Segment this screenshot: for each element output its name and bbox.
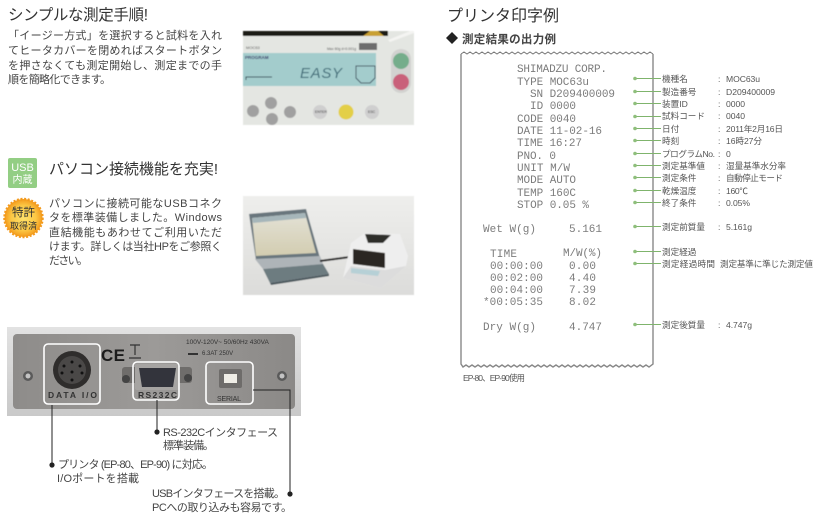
photo: rear panel connectors: RS232C <box>138 390 177 400</box>
annotation labels: 測定経過 <box>662 246 697 257</box>
photo: control panel with EASY display: Max 60g d=0.001g <box>327 47 356 51</box>
annotation labels: プログラムNo. <box>662 148 715 159</box>
receipt printed text: TEMP 160C <box>517 188 576 200</box>
annotation labels: : <box>718 320 720 330</box>
annotation labels: : <box>718 161 720 171</box>
annotation labels: : <box>718 173 720 183</box>
heading: PC connection: パソコン接続機能を充実! <box>49 161 218 178</box>
annotation labels: : <box>718 87 720 97</box>
photo: rear panel connectors: 100V-120V~ 50/60Hz 430VA <box>186 339 269 346</box>
annotation labels: 乾燥温度 <box>662 185 697 196</box>
text block: simple procedure <box>8 28 222 86</box>
annotation labels: 0040 <box>726 111 745 121</box>
receipt printed text: *00:05:35 <box>483 297 543 309</box>
annotation labels: 自動停止モード <box>726 172 783 183</box>
text block: simple procedure: 「イージー方式」を選択すると試料を入れ <box>8 28 222 42</box>
annotation dots <box>633 77 637 326</box>
caption: printer model: EP-80、EP-90使用 <box>463 373 525 383</box>
annotation labels: 測定経過時間 <box>662 258 715 269</box>
text block: PC connection <box>49 196 222 267</box>
photo: rear panel connectors: 6.3AT 250V <box>202 351 233 357</box>
annotation labels: 2011年2月16日 <box>726 123 783 134</box>
receipt printed text: M/W(%) <box>563 248 602 260</box>
receipt printed text: CODE 0040 <box>517 114 576 126</box>
receipt sides and bottom <box>461 54 653 367</box>
annotation labels: 測定条件 <box>662 172 697 183</box>
badge: USB built in: USB <box>11 162 34 174</box>
annotation labels: 0000 <box>726 99 745 109</box>
photo: control panel with EASY display: MOC63 <box>246 45 261 50</box>
callout: RS-232C interface: 標準装備。 <box>163 438 214 452</box>
heading: printer output example: プリンタ印字例 <box>447 7 559 25</box>
annotation labels: 測定基準値 <box>662 160 705 171</box>
annotation labels: : <box>718 136 720 146</box>
annotation labels: : <box>718 198 720 208</box>
receipt printed text <box>483 64 615 334</box>
receipt printed text: 00:02:00 <box>490 273 543 285</box>
badge: patent acquired <box>4 199 42 237</box>
callout: printer I/O port: プリンタ (EP-80、EP-90) に対応。 <box>58 458 213 471</box>
receipt printed text: TIME <box>490 249 517 261</box>
text block: simple procedure: てヒータカバーを閉めればスタートボタン <box>8 44 222 57</box>
receipt printed text: TIME 16:27 <box>517 138 582 150</box>
annotation labels: 時刻 <box>662 136 679 146</box>
receipt printed text: 0.00 <box>569 261 596 273</box>
text block: PC connection: パソコンに接続可能なUSBコネク <box>49 196 222 210</box>
photo: rear panel connectors <box>7 327 301 416</box>
annotation labels: 製造番号 <box>662 86 697 97</box>
photo: control panel with EASY display: ENTER <box>315 110 327 114</box>
annotation labels: 5.161g <box>726 222 752 232</box>
callout: printer I/O port: I/Oポートを搭載 <box>57 472 139 485</box>
callout: printer I/O port <box>49 405 213 485</box>
annotation labels: MOC63u <box>726 74 760 84</box>
annotation labels: 装置ID <box>662 98 688 109</box>
receipt printed text: 7.39 <box>569 285 596 297</box>
receipt printed text: TYPE MOC63u <box>517 77 589 89</box>
callout: USB interface <box>152 390 293 514</box>
annotation labels: : <box>718 222 720 232</box>
annotation labels: : <box>718 74 720 84</box>
receipt printed text: STOP 0.05 % <box>517 200 589 212</box>
photo: control panel with EASY display: EASY <box>300 65 343 82</box>
callout frames <box>44 344 253 404</box>
annotation labels: 0.05% <box>726 198 750 208</box>
annotation labels: 湿量基準水分率 <box>726 160 786 171</box>
receipt printed text: Dry W(g) <box>483 322 536 334</box>
callout: USB interface: USBインタフェースを搭載。 <box>152 487 285 500</box>
receipt printed text: DATE 11-02-16 <box>517 126 602 138</box>
annotation leader lines <box>635 78 661 324</box>
text block: PC connection: タを標準装備しました。Windows <box>49 210 222 224</box>
annotation labels: 16時27分 <box>726 136 762 146</box>
receipt printed text: 4.40 <box>569 273 596 285</box>
photo: control panel with EASY display: PROGRAM <box>245 55 269 60</box>
badge: patent acquired: 特許 <box>12 205 35 219</box>
annotation labels: : <box>718 99 720 109</box>
receipt printed text: SN D209400009 <box>530 89 615 101</box>
annotation labels: : <box>718 124 720 134</box>
icon: ground symbol <box>129 345 141 358</box>
annotation labels: 測定前質量 <box>662 221 705 232</box>
annotation labels: 0 <box>726 149 731 159</box>
annotation labels <box>662 73 813 330</box>
text block: PC connection: けます。詳しくは当社HPをご参照く <box>49 239 222 253</box>
annotation labels: : <box>718 186 720 196</box>
annotation labels: 160℃ <box>726 186 748 196</box>
annotation labels: 終了条件 <box>662 197 697 208</box>
annotation labels: : <box>718 149 720 159</box>
callout: RS-232C interface: RS-232Cインタフェース <box>163 426 278 439</box>
receipt printed text: MODE AUTO <box>517 175 576 187</box>
receipt printed text: 00:04:00 <box>490 285 543 297</box>
text block: PC connection: 直結機能もあわせてご利用いただ <box>49 225 222 239</box>
annotation labels: : <box>718 111 720 121</box>
badge: patent acquired: 取得済 <box>10 220 37 231</box>
annotation labels: 測定基準に準じた測定値 <box>720 258 813 269</box>
text block: simple procedure: を押さなくても測定開始し、測定までの手 <box>8 58 222 72</box>
receipt printed text: 5.161 <box>569 224 602 236</box>
badge: USB built in: 内蔵 <box>12 173 32 186</box>
heading: simple procedure: シンプルな測定手順! <box>8 6 148 24</box>
callout: USB interface: PCへの取り込みも容易です。 <box>152 501 292 514</box>
receipt printed text: 4.747 <box>569 322 602 334</box>
annotation labels: D209400009 <box>726 87 775 97</box>
photo: rear panel connectors: DATA I/O <box>48 390 97 400</box>
badge: USB built in <box>8 158 37 188</box>
annotation labels: 4.747g <box>726 320 752 330</box>
annotation labels: 機種名 <box>662 73 688 84</box>
receipt printed text: 00:00:00 <box>490 261 543 273</box>
text block: PC connection: ださい。 <box>49 254 88 267</box>
receipt printed text: UNIT M/W <box>517 163 570 175</box>
callout: RS-232C interface <box>154 400 278 452</box>
photo: rear panel connectors: CE <box>101 346 125 365</box>
receipt printed text: SHIMADZU CORP. <box>517 64 607 76</box>
text block: simple procedure: 順を簡略化できます。 <box>8 72 111 86</box>
receipt printed text: 8.02 <box>569 297 596 309</box>
subheading: measurement output example: 測定結果の出力例 <box>462 32 556 46</box>
photo: rear panel connectors: SERIAL <box>217 396 241 403</box>
annotation labels: 測定後質量 <box>662 319 705 330</box>
receipt printed text: PNO. 0 <box>517 151 556 163</box>
receipt outline <box>461 52 653 54</box>
receipt printed text: Wet W(g) <box>483 224 536 236</box>
photo: control panel with EASY display: ESC <box>368 110 376 114</box>
annotation labels: 試料コード <box>662 110 705 121</box>
annotation labels: 日付 <box>662 124 680 134</box>
receipt printed text: ID 0000 <box>530 101 576 113</box>
photo: laptop and moisture balance <box>243 196 414 295</box>
photo: control panel with EASY display <box>243 31 414 125</box>
